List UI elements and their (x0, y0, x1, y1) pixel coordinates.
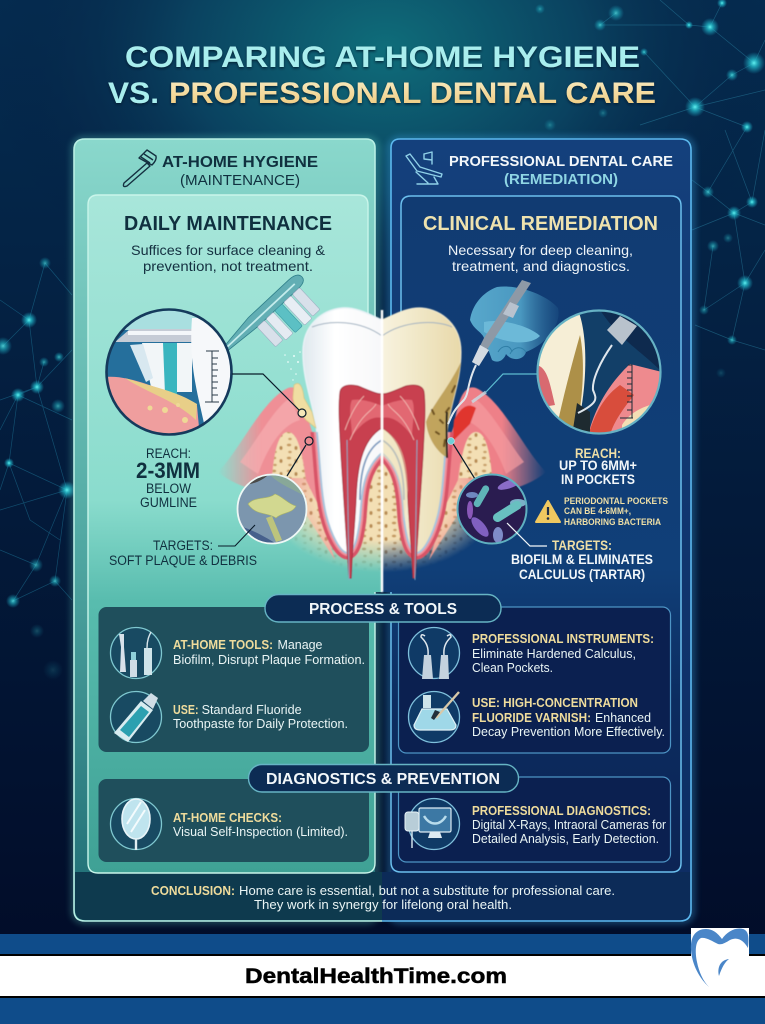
footer band (0, 934, 765, 1024)
callout lines right (486, 374, 537, 392)
text: at-home checks (173, 811, 348, 839)
alveolar bone (290, 460, 474, 571)
heading: at-home hygiene: (MAINTENANCE) (180, 172, 300, 189)
reach label left: GUMLINE (140, 495, 197, 510)
heading: clinical remediation: Necessary for deep cleaning, (448, 242, 633, 258)
outer comparison frame with conclusion band (70, 135, 696, 925)
text: professional instruments: PROFESSIONAL INSTRUMENTS: (472, 632, 654, 646)
text: at-home tools: AT-HOME TOOLS: (173, 638, 273, 652)
inset: scaler in pocket (536, 310, 662, 436)
icon: dental chair outline (406, 152, 442, 184)
footer logo tooth (691, 928, 749, 987)
heading: daily maintenance: DAILY MAINTENANCE (124, 213, 332, 235)
reach label right: UP TO 6MM+ (559, 458, 637, 473)
title: PROFESSIONAL DENTAL CARE (169, 77, 656, 110)
heading: daily maintenance: Suffices for surface cleaning & (131, 242, 326, 258)
callout target line right (507, 523, 547, 546)
network decoration left (0, 257, 76, 680)
text: at-home checks: AT-HOME CHECKS: (173, 811, 282, 825)
conclusion: Home care is essential, but not a substitute for professional care. (239, 884, 615, 898)
periodontal ligament band (310, 431, 454, 560)
heading: clinical remediation (423, 213, 658, 274)
text: at-home use: USE: (173, 703, 198, 717)
panel: professional diagnostics box (398, 777, 670, 862)
heading: at-home hygiene: AT-HOME HYGIENE (162, 154, 318, 171)
icon: toothpaste (110, 692, 162, 742)
blue dentin edge (316, 432, 448, 554)
icon: professional instruments (408, 628, 460, 679)
text: professional instruments: Clean Pockets. (472, 661, 553, 675)
text: professional diagnostics (472, 804, 666, 846)
conclusion: CONCLUSION: (151, 884, 235, 898)
callout target line left (218, 525, 255, 546)
text: fluoride varnish: Enhanced (595, 711, 651, 725)
text: at-home use (173, 703, 348, 731)
heading: daily maintenance: prevention, not treatment. (143, 258, 313, 274)
heading: clinical remediation: treatment, and diagnostics. (452, 258, 630, 274)
sparkles near brush (284, 351, 301, 381)
text: at-home tools: Biofilm, Disrupt Plaque Formation. (173, 653, 365, 667)
title: COMPARING AT-HOME HYGIENE (125, 41, 640, 74)
heading: professional dental care: (REMEDIATION) (504, 171, 618, 188)
heading: daily maintenance (124, 213, 332, 274)
targets label right: BIOFILM & ELIMINATES (511, 552, 653, 567)
icon: toothbrush outline (123, 150, 156, 187)
warning text: HARBORING BACTERIA (564, 517, 661, 528)
text: fluoride varnish: Decay Prevention More Effectively. (472, 725, 665, 739)
scaler contact highlight (472, 392, 486, 402)
reach label right (559, 446, 637, 487)
illustration: tooth cross-section (218, 308, 546, 600)
icon: mirror (110, 798, 162, 850)
ruler (620, 365, 633, 418)
warning text (564, 496, 668, 528)
pill: process and tools: PROCESS & TOOLS (309, 601, 457, 618)
pill: diagnostics and prevention (248, 764, 518, 792)
panel: at-home inner (88, 195, 382, 873)
text: at-home checks: Visual Self-Inspection (Limited). (173, 825, 348, 839)
text: fluoride varnish: FLUORIDE VARNISH: (472, 711, 591, 725)
heading: clinical remediation: CLINICAL REMEDIATION (423, 213, 658, 235)
stains on right tooth (426, 362, 461, 458)
reach label right: REACH: (575, 446, 621, 461)
targets label left: SOFT PLAQUE & DEBRIS (109, 553, 257, 568)
pill: process and tools (265, 594, 501, 622)
targets label right: CALCULUS (TARTAR) (519, 567, 645, 582)
text: professional diagnostics: PROFESSIONAL DIAGNOSTICS: (472, 804, 651, 818)
ruler (205, 351, 219, 402)
targets label left (109, 538, 257, 568)
panel: at-home diagnostics box (98, 779, 369, 862)
warning text: CAN BE 4-6MM+, (564, 506, 631, 517)
inset: bacteria (456, 473, 528, 545)
gum left and right (218, 387, 546, 560)
text: fluoride varnish: USE: HIGH-CONCENTRATION (472, 696, 638, 710)
center divider (381, 310, 383, 592)
pulp chamber (339, 385, 425, 580)
reach label left: BELOW (146, 481, 191, 496)
panel: professional inner (382, 196, 681, 872)
hand with glove and probe (448, 280, 559, 424)
conclusion (151, 884, 615, 912)
text: at-home use: Toothpaste for Daily Protection. (173, 717, 348, 731)
targets label right (511, 538, 653, 582)
cream dentin tint right (382, 395, 408, 520)
conclusion band background (75, 872, 690, 920)
text: at-home use: Standard Fluoride (202, 703, 302, 717)
reach label left: 2-3MM (136, 458, 200, 483)
text: professional instruments: Eliminate Hardened Calculus, (472, 647, 636, 661)
reach label left: REACH: (146, 446, 191, 461)
heading: professional dental care (449, 153, 673, 188)
icon: warning triangle (536, 501, 560, 522)
warning text: PERIODONTAL POCKETS (564, 496, 668, 507)
illustration: toothbrush (219, 272, 327, 377)
icon: digital x-ray (405, 798, 460, 850)
inset: soft plaque (236, 473, 308, 546)
title: VS. (108, 77, 159, 110)
inset: brushing at gumline (105, 308, 235, 438)
callout lines left (232, 374, 313, 476)
icon: fluoride varnish (408, 692, 460, 742)
enamel right half (382, 306, 462, 552)
pill: diagnostics and prevention: DIAGNOSTICS & PREVENTION (266, 771, 500, 788)
plaque clump (293, 383, 316, 428)
crown ridge (312, 323, 452, 336)
title (108, 41, 656, 110)
text: at-home tools: Manage (278, 638, 323, 652)
enamel left half (302, 306, 382, 552)
reach label left (136, 446, 200, 510)
panel: professional process box (398, 607, 670, 753)
text: professional diagnostics: Digital X-Rays, Intraoral Cameras for (472, 818, 666, 832)
text: professional diagnostics: Detailed Analysis, Early Detection. (472, 832, 659, 846)
text: fluoride varnish (472, 696, 665, 739)
network decoration right (535, 0, 765, 378)
reach label right: IN POCKETS (561, 472, 635, 487)
icon: at-home tools (110, 628, 162, 678)
panel: at-home process box (98, 607, 369, 752)
conclusion: They work in synergy for lifelong oral health. (254, 898, 512, 912)
text: professional instruments (472, 632, 654, 675)
text: at-home tools (173, 638, 365, 667)
targets label right: TARGETS: (552, 538, 612, 553)
heading: at-home hygiene (162, 154, 318, 189)
heading: professional dental care: PROFESSIONAL DENTAL CARE (449, 153, 673, 170)
bone islands under gum (272, 432, 492, 478)
footer website: DentalHealthTime.com (245, 965, 507, 988)
pocket pointer (448, 438, 475, 479)
targets label left: TARGETS: (153, 538, 213, 553)
